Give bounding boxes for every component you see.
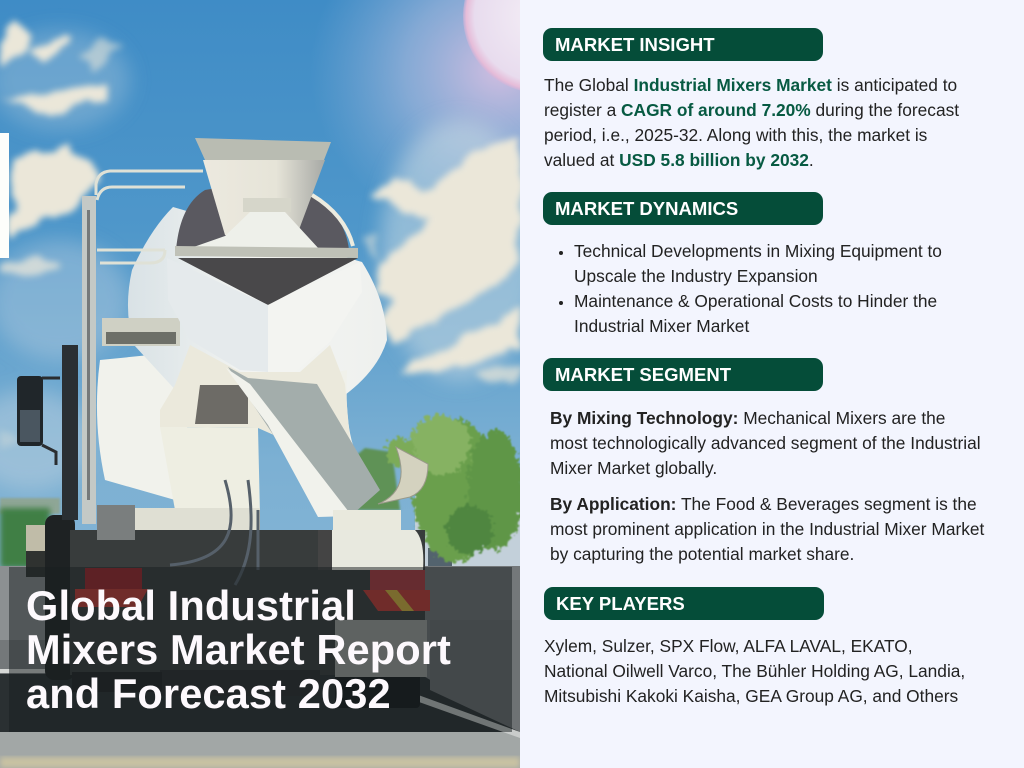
text: by mixing technology xyxy=(550,408,981,478)
text: by application xyxy=(550,494,984,564)
text: key players: National Oilwell Varco, The Bühler Holding AG, Landia, xyxy=(544,661,965,681)
wheels and chassis xyxy=(45,515,75,680)
cab side xyxy=(62,345,78,520)
photo: concrete mixer truck under blue sky xyxy=(0,0,520,768)
text: market dynamics bullets xyxy=(559,241,942,336)
text: market dynamics bullets: Technical Developments in Mixing Equipment to xyxy=(574,241,942,261)
heading: key players xyxy=(544,587,824,620)
text: by application: by capturing the potential market share. xyxy=(550,544,854,564)
sky haze xyxy=(0,30,540,490)
V-shaped rear plate xyxy=(178,258,358,305)
title band xyxy=(9,567,512,732)
text: key players: Xylem, Sulzer, SPX Flow, ALFA LAVAL, EKATO, xyxy=(544,636,913,656)
distant hills and roadside xyxy=(0,498,60,514)
hoses xyxy=(170,480,258,585)
text: market dynamics bullets: Maintenance & Operational Costs to Hinder the xyxy=(574,291,937,311)
road xyxy=(0,566,520,768)
title: Global Industrial xyxy=(26,582,356,629)
heading: key players: KEY PLAYERS xyxy=(556,593,685,614)
heading: market insight: MARKET INSIGHT xyxy=(555,34,715,55)
text: by mixing technology: By Mixing Technology: Mechanical Mixers are the xyxy=(550,408,945,428)
drum lower left xyxy=(97,350,200,500)
text: market dynamics bullets: Industrial Mixer Market xyxy=(574,316,749,336)
drum opening xyxy=(176,180,349,250)
hopper xyxy=(195,138,331,160)
clouds xyxy=(0,18,520,450)
drum xyxy=(128,207,387,395)
spout xyxy=(378,447,428,504)
text: by mixing technology: most technologically advanced segment of the Industrial xyxy=(550,433,981,453)
panel: right background xyxy=(520,0,1024,768)
text: by mixing technology: Mixer Market globally. xyxy=(550,458,717,478)
ladder and rails xyxy=(82,196,96,524)
heading: market dynamics xyxy=(543,192,823,225)
text: market insight: period, i.e., 2025-32. Along with this, the market is xyxy=(544,125,927,145)
building xyxy=(415,496,520,572)
lights and chevrons xyxy=(85,568,142,590)
cross bar xyxy=(175,246,358,258)
discharge chute xyxy=(228,367,380,514)
text: market insight: The Global Industrial Mixers Market is anticipated to xyxy=(544,75,957,95)
heading: market insight xyxy=(543,28,823,61)
text: key players: Mitsubishi Kakoki Kaisha, GEA Group AG, and Others xyxy=(544,686,958,706)
heading: market segment xyxy=(543,358,823,391)
mirror xyxy=(17,376,43,446)
text: market insight xyxy=(544,75,959,170)
text: by application: By Application: The Food & Beverages segment is the xyxy=(550,494,977,514)
text: market dynamics bullets: Upscale the Industry Expansion xyxy=(574,266,818,286)
text: market insight: valued at USD 5.8 billion by 2032. xyxy=(544,150,814,170)
heading: market dynamics: MARKET DYNAMICS xyxy=(555,198,738,219)
text: market insight: register a CAGR of around 7.20% during the forecast xyxy=(544,100,959,120)
far truck xyxy=(26,525,46,551)
truck xyxy=(17,138,430,708)
heading: market segment: MARKET SEGMENT xyxy=(555,364,731,385)
title: and Forecast 2032 xyxy=(26,670,391,717)
text: by application: most prominent application in the Industrial Mixer Market xyxy=(550,519,984,539)
text: key players xyxy=(544,636,965,706)
title: Mixers Market Report xyxy=(26,626,451,673)
lower frame xyxy=(160,345,350,460)
tree xyxy=(385,415,523,562)
wheel guard xyxy=(327,530,423,570)
white edge tab xyxy=(0,133,9,258)
title xyxy=(26,582,451,717)
step xyxy=(102,318,180,346)
